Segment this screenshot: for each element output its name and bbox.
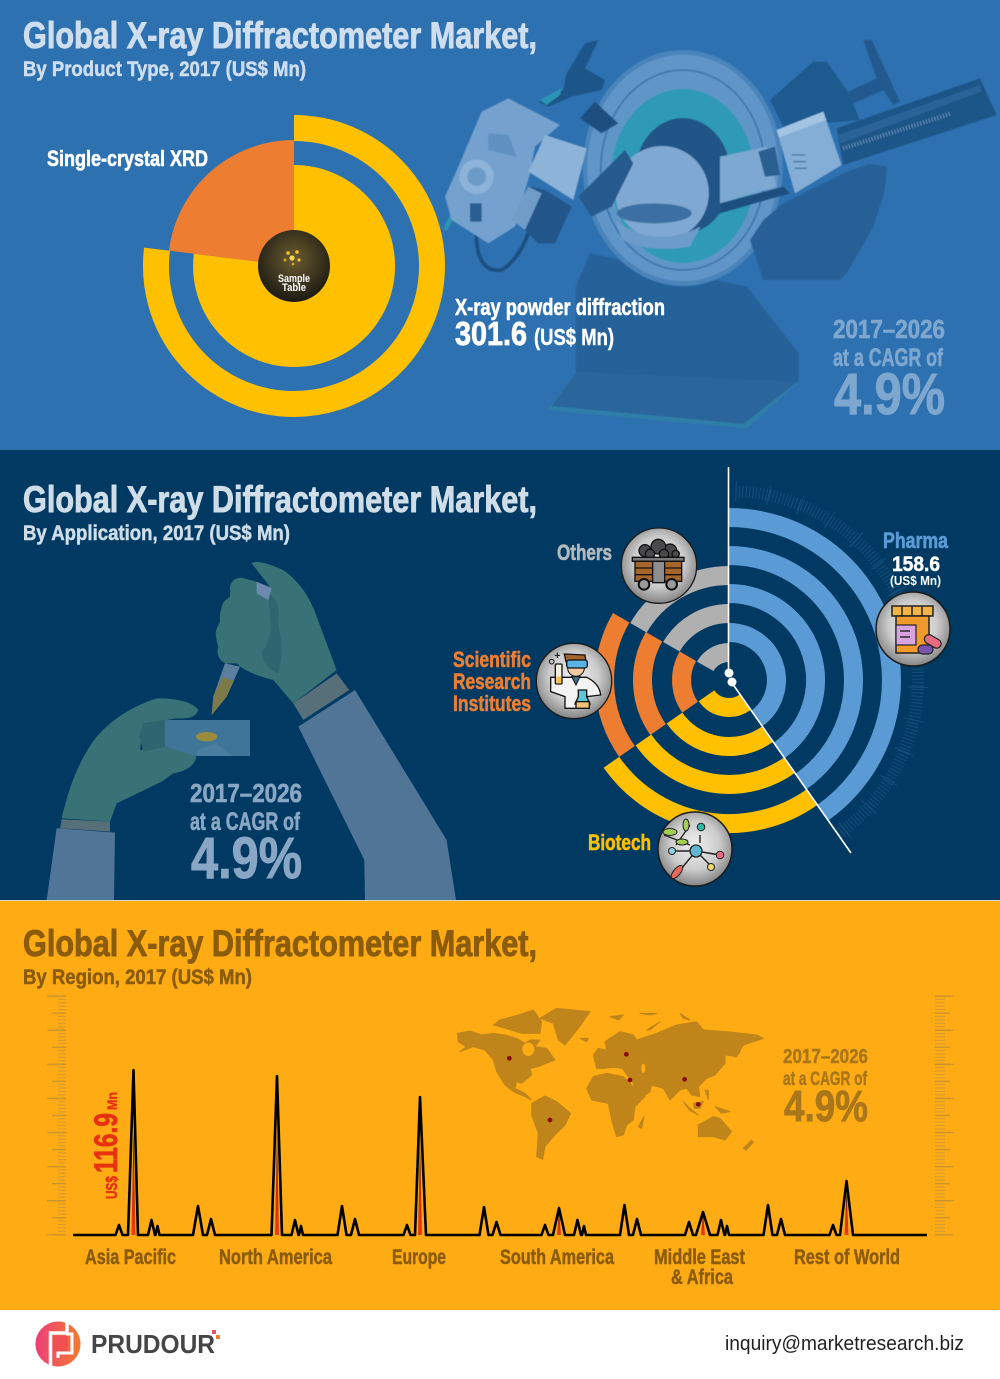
icon: sample table: Sample [278,273,310,285]
callout: CAGR: at a CAGR of [833,344,943,372]
value label: Asia Pacific: US$ [104,1176,121,1199]
label: scientific research institutes: Institutes [453,691,531,716]
footer [0,1310,1000,1379]
labels: regions: Asia Pacific [85,1246,176,1269]
title: Global X-ray Diffractometer Market, [23,923,537,964]
label: pharma: (US$ Mn) [890,573,941,588]
callout: CAGR [190,778,302,891]
logo: Prudour: PRUDOUR [91,1329,215,1359]
scale: right ruler [935,996,954,1236]
logo: Prudour [36,1321,220,1367]
icon: biotech network [658,812,732,886]
label: single-crystal XRD: Single-crystal XRD [47,146,208,171]
label: others: Others [557,540,612,565]
label: pharma: Pharma [883,528,949,553]
callout: CAGR: 4.9% [191,826,302,891]
subtitle: By Product Type, 2017 (US$ Mn) [23,58,306,81]
value label: Asia Pacific: Mn [104,1092,120,1110]
callout: CAGR: 2017–2026 [833,314,945,344]
callout: CAGR: 4.9% [784,1082,868,1131]
chart: region spectrum peaks [73,1070,927,1235]
contact email: inquiry@marketresearch.biz [725,1333,964,1355]
labels: regions: & Africa [671,1266,733,1289]
label: pharma: 158.6 [892,553,940,576]
illustration: diffractometer machine [445,40,997,428]
labels: regions [85,1246,900,1289]
chart: product type radial pie [156,128,432,404]
map: world with locations [457,1008,763,1159]
panel: by application [0,450,1000,900]
callout: CAGR: at a CAGR of [783,1069,867,1090]
scale: left ruler [47,996,66,1236]
icon: scientist [536,643,612,719]
panel: by region [0,900,1000,1310]
label: x-ray powder diffraction: (US$ Mn) [534,324,614,350]
subtitle: By Region, 2017 (US$ Mn) [23,966,252,989]
label: x-ray powder diffraction: X-ray powder diffraction [455,294,665,320]
callout: CAGR: 4.9% [834,362,945,427]
title: Global X-ray Diffractometer Market, [23,479,537,520]
title: Global X-ray Diffractometer Market, [23,15,537,56]
icon: sample table [258,230,330,302]
labels: regions: Middle East [654,1246,745,1269]
labels: regions: South America [500,1246,614,1269]
label: scientific research institutes: Scientific [453,647,531,672]
icon: sample table: Table [282,282,306,294]
label: pharma [883,528,949,588]
callout: CAGR [833,314,945,427]
icon: pharma bottle [876,592,950,666]
value label: Asia Pacific: 116.9 [88,1113,124,1173]
label: biotech: Biotech [588,830,651,855]
callout: CAGR [783,1046,868,1131]
illustration: gloved hands with pipette [47,562,456,900]
callout: CAGR: 2017–2026 [190,778,302,808]
labels: regions: North America [219,1246,332,1269]
icon: mine cart [621,528,697,603]
label: x-ray powder diffraction [455,294,665,352]
chart: application concentric rings [605,467,918,853]
label: scientific research institutes [453,647,531,716]
label: x-ray powder diffraction: 301.6 [455,315,527,352]
labels: regions: Europe [392,1246,446,1269]
label: scientific research institutes: Research [453,669,531,694]
labels: regions: Rest of World [794,1246,900,1269]
subtitle: By Application, 2017 (US$ Mn) [23,522,290,545]
callout: CAGR: 2017–2026 [783,1046,868,1068]
panel: by product type [0,0,1000,450]
callout: CAGR: at a CAGR of [190,808,300,836]
